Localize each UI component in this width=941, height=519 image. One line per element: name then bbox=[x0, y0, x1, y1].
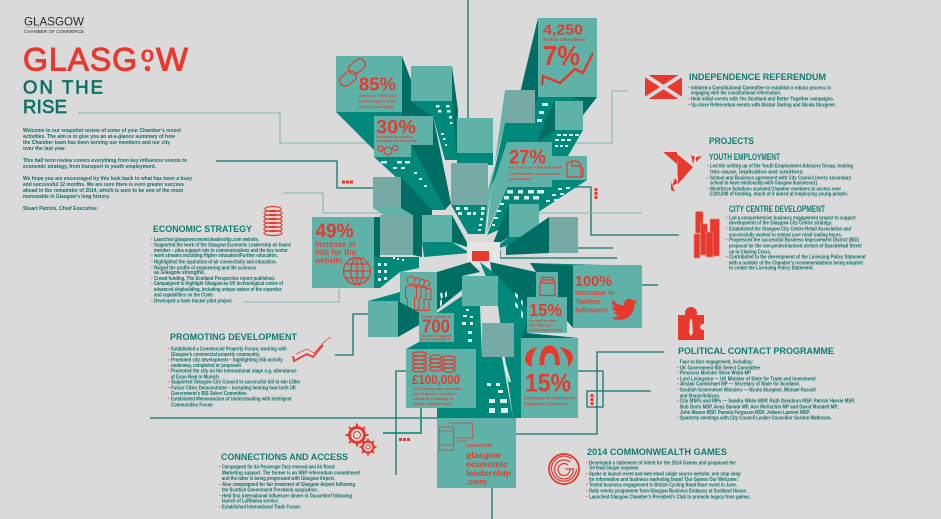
panel: political contact programme: John Mason MSP, Pamela Ferguson MSP, Johann Lamont MSP. bbox=[680, 410, 810, 416]
panel: political contact programme: Lord Livingston — UK Minister of State for Trade and Investment bbox=[680, 376, 816, 382]
building: 15% partners: Increase in Partners/ bbox=[524, 396, 576, 402]
logo bbox=[24, 14, 85, 35]
building: grey tower right of centre bbox=[485, 90, 538, 232]
city centre development: development of the Glasgow City Centre strategy. bbox=[729, 221, 832, 227]
title: o bbox=[140, 41, 154, 67]
city centre development: proposal for the non-pedestrianised stretch of Sauchiehall Street bbox=[729, 243, 862, 249]
youth employment: Workforce Solutions assisted Chamber members to access over bbox=[710, 186, 841, 192]
building: grey far right bbox=[506, 217, 578, 255]
panel: economic strategy: Launched glasgoweconomicleadership.com website. bbox=[154, 237, 259, 243]
panel: promoting development: PROMOTING DEVELOPMENT bbox=[170, 332, 297, 343]
building: launched website: glasgow bbox=[466, 450, 501, 460]
intro text: This half term review covers everything from key influencer events to bbox=[23, 158, 187, 164]
panel: economic strategy: ECONOMIC STRATEGY bbox=[153, 224, 253, 235]
building: 700: for the Glasgow bbox=[421, 334, 451, 338]
city centre development: up to Charing Cross. bbox=[729, 250, 771, 256]
building: 15% documents: international bbox=[529, 324, 551, 328]
city centre development: with a number of the Chamber's recommendations being adopted bbox=[728, 260, 863, 266]
logo: GLASGOW bbox=[24, 14, 85, 28]
panel: 2014 commonwealth games: 'Get Ready Glasgow' programme. bbox=[589, 466, 639, 472]
building: £100,000: of funding was secured bbox=[413, 386, 462, 391]
city centre development: successfully worked to extend core retail trading hours. bbox=[729, 232, 842, 238]
building: 49% website: Increase in bbox=[315, 240, 356, 249]
youth employment: into cause, implication and solutions. bbox=[710, 169, 805, 175]
panel: economic strategy: Crowd funding, The Scotland Perspective report published. bbox=[154, 276, 275, 282]
panel: political contact programme: and Shona Robison. bbox=[680, 393, 720, 399]
title: W bbox=[156, 42, 189, 78]
panel: 2014 commonwealth games: 2014 COMMONWEALTH GAMES bbox=[587, 447, 727, 458]
panel: connections and access: Marketing support. The former is an SNP referendum commitment bbox=[222, 470, 360, 476]
building: 100% Twitter: Increase in bbox=[575, 288, 615, 297]
intro text bbox=[23, 128, 192, 212]
panel: connections and access: Held first international influencer dinner in Dusseldorf following bbox=[222, 493, 352, 499]
youth employment bbox=[707, 152, 853, 198]
building: 15% partners: Platinum Partners. bbox=[524, 402, 569, 408]
building: 15% documents: Increase in career bbox=[529, 319, 559, 323]
panel: economic strategy: Developed a trade tracker pilot project. bbox=[154, 298, 233, 304]
panel: promoting development: underway, completed or proposed. bbox=[171, 363, 242, 369]
building: 27% certification documents: certification documents bbox=[509, 171, 560, 176]
building: launched website: economic bbox=[466, 459, 508, 469]
panel: economic strategy: as Glasgow strengths. bbox=[154, 270, 206, 276]
building: 27% certification documents bbox=[487, 142, 587, 235]
panel: independence referendum: Initiated a Constitutional Committee to establish a robust process to bbox=[691, 85, 831, 91]
centre square bbox=[467, 242, 500, 267]
panel: economic strategy: Campaigned to highlight Glasgow as UK technological centre of bbox=[154, 281, 283, 287]
panel: promoting development: Promoted the city on the international stage e.g. attendance bbox=[171, 369, 297, 375]
intro text: economic strategy, from transport to youth employment. bbox=[23, 164, 157, 170]
building: 700: 700 bbox=[422, 317, 450, 337]
panel: promoting development: Supported Glasgow City Council in successful bid to win £26m bbox=[171, 380, 300, 386]
city centre development bbox=[726, 204, 866, 271]
building: launched website bbox=[437, 418, 516, 488]
building: £100,000: youth employment bbox=[413, 401, 451, 406]
building: back tower bbox=[411, 66, 458, 160]
building: 30% outside membership bbox=[374, 116, 451, 210]
panel: 2014 commonwealth games: for information and business marketing brand 'Our Games Our Welcome.' bbox=[589, 477, 739, 483]
building: 15% partners: 15% bbox=[525, 370, 571, 398]
panel: independence referendum bbox=[688, 72, 836, 108]
building: 100% Twitter: 100% bbox=[575, 273, 612, 290]
panel: political contact programme: Quarterly meetings with City Council Leader Councillor Gordon Matheson. bbox=[680, 415, 832, 421]
panel: political contact programme: UK Government BIS Select Committee bbox=[680, 365, 760, 371]
building: light front left bbox=[422, 215, 470, 257]
intro text: memorable in Glasgow's long history. bbox=[23, 194, 111, 200]
icon: city buildings bbox=[694, 212, 720, 258]
building: 85% member retention: 85% bbox=[359, 74, 396, 94]
panel: connections and access: launch of Lufthansa service. bbox=[222, 499, 279, 505]
panel: economic strategy: Supported the work of the Glasgow Economic Leadership on board bbox=[154, 242, 291, 248]
building: 4,250 event attendees: 4,250 bbox=[543, 22, 583, 38]
building: centre grey bbox=[451, 163, 488, 234]
panel: promoting development: Established a Commercial Property Forum, working with bbox=[171, 346, 287, 352]
intro text: the Chamber team has been serving our members and our city bbox=[23, 140, 170, 146]
city centre development: CITY CENTRE DEVELOPMENT bbox=[729, 204, 825, 215]
building: 4,250 event attendees: 7% bbox=[543, 40, 580, 71]
panel: economic strategy: advanced shipbuilding, including unique nature of the expertise bbox=[154, 287, 282, 293]
building: 85% member retention: Member retention bbox=[359, 93, 398, 98]
panel: connections and access: Established International Trade Forum. bbox=[222, 504, 301, 510]
building: centre rear bbox=[457, 118, 493, 165]
building: people bbox=[400, 272, 437, 313]
city centre development: Established the Glasgow City Centre Retail Association and bbox=[729, 226, 851, 232]
building: small right tower bbox=[537, 101, 583, 156]
panel: economic strategy: member – plus support role to communications and the key sector bbox=[154, 248, 288, 254]
building: 700: Annual estimate of bbox=[421, 315, 452, 319]
building: 27% certification documents: Increase in international bbox=[509, 164, 561, 170]
building: 49% website bbox=[312, 217, 419, 288]
city centre development: Led a comprehensive business engagement project to support bbox=[729, 215, 856, 221]
building: grey centre bottom bbox=[482, 323, 514, 357]
logo: CHAMBER OF COMMERCE bbox=[24, 29, 84, 35]
title bbox=[23, 41, 189, 117]
building: 100% Twitter: followers bbox=[575, 306, 608, 314]
panel: connections and access bbox=[219, 452, 360, 510]
building: 27% certification documents: 27% bbox=[509, 148, 546, 168]
intro text: and successful 12 months. We are sure there is even greater success bbox=[23, 182, 184, 188]
panel: political contact programme: Face to face engagement, including: bbox=[680, 360, 753, 366]
panel: economic strategy: work streams including Higher education/Further education. bbox=[153, 253, 278, 259]
panel: independence referendum: Up close Referendum events with Alistair Darling and Nicola Sturgeon. bbox=[691, 102, 836, 108]
windows: lower bbox=[440, 291, 523, 413]
building: 4,250 event attendees: Event attendees bbox=[543, 37, 586, 42]
panel: promoting development: at Expo Real in Munich. bbox=[171, 374, 220, 380]
intro text: Stuart Patrick, Chief Executive bbox=[23, 206, 97, 212]
icon: zigzag growth line bbox=[293, 337, 331, 361]
building: 100% Twitter: Twitter bbox=[575, 297, 601, 306]
panel: promoting development: Government's BIS Select Committee. bbox=[171, 391, 248, 397]
panel: political contact programme: Scottish Government Ministers — Nicola Sturgeon, Michael Russell bbox=[680, 387, 816, 393]
building: 85% member retention bbox=[336, 56, 433, 150]
panel: political contact programme bbox=[677, 346, 855, 421]
panel: economic strategy: Raised the profile of engineering and life sciences bbox=[154, 265, 256, 271]
panel: political contact programme: City MSPs and MPs — Sandra White MSP, Ruth Davidson MSP, Patrick Harvie MSP, bbox=[680, 399, 855, 405]
panel: 2014 commonwealth games: Tested business engagement in British Cycling Road Race event in June. bbox=[589, 482, 737, 488]
panel: political contact programme: Bob Doris MSP, Anas Sarwar MP, Ann McKechin MP and David Mundell MP, bbox=[680, 404, 838, 410]
panel: political contact programme: Pensions Minister Steve Webb MP bbox=[680, 370, 751, 376]
building: launched website: Launched/ bbox=[466, 443, 493, 449]
icon: coins bbox=[264, 206, 282, 236]
intro text: Welcome to our snapshot review of some of your Chamber's recent bbox=[23, 128, 181, 134]
panel: 2014 commonwealth games: Spoke at launch event and web email single source website, one stop shop bbox=[589, 472, 741, 478]
building: 49% website: 49% bbox=[316, 220, 354, 242]
building: grey left tower bbox=[373, 177, 432, 232]
panel: 2014 commonwealth games: Developed a statement of intent for the 2014 Games and proposed the bbox=[589, 460, 736, 466]
building: 27% certification documents: processed bbox=[509, 176, 532, 181]
icon: gears bbox=[346, 424, 376, 456]
panel: 2014 commonwealth games: Daily events programme from Glasgow Business Embassy at Scotland House. bbox=[589, 488, 747, 494]
intro text: We hope you are encouraged by this look back to what has been a busy bbox=[23, 176, 192, 182]
red connector dots bbox=[342, 180, 598, 441]
panel: economic strategy bbox=[151, 224, 291, 304]
building: launched website: .com bbox=[466, 476, 487, 486]
panel: promoting development: Communities Forum bbox=[171, 402, 213, 408]
city centre development: Progressed the successful Business Improvement District (BID) bbox=[729, 238, 859, 244]
building: 15% documents: 15% bbox=[529, 300, 562, 320]
building: 85% member retention: (15% higher than bbox=[359, 98, 397, 104]
building: grey front left bbox=[380, 215, 422, 257]
icon: G logo bbox=[549, 454, 579, 484]
building: 15% documents bbox=[527, 272, 567, 333]
building: 15% documents: documents processed bbox=[529, 328, 562, 332]
panel: 2014 commonwealth games: Launched Glasgow Chamber's President's Club to promote legacy from games. bbox=[589, 494, 751, 500]
panel: connections and access: Also campaigned for fair treatment of Glasgow Airport following bbox=[222, 482, 355, 488]
panel: projects: PROJECTS bbox=[709, 136, 754, 147]
building: light front right bbox=[491, 204, 539, 250]
panel: promoting development: Promoted city development – highlighting £6b activity bbox=[171, 358, 283, 364]
city centre development: Contributed to the development of the Licensing Policy Statement bbox=[729, 254, 866, 260]
intro text: ahead in the remainder of 2014, which is sure to be one of the most bbox=[23, 188, 183, 194]
panel: connections and access: CONNECTIONS AND ACCESS bbox=[221, 452, 348, 463]
connector lines bbox=[78, 0, 679, 519]
building: centre box bbox=[462, 276, 498, 306]
panel: projects bbox=[707, 136, 866, 271]
panel: promoting development bbox=[168, 332, 300, 408]
panel: promoting development: Future Cities Demonstrator – including hearing how both UK bbox=[171, 385, 296, 391]
panel: connections and access: and the latter is being progressed with Glasgow Airport. bbox=[222, 476, 335, 482]
building: launched website: leadership bbox=[466, 468, 511, 478]
building: 30% outside membership: 30% bbox=[376, 118, 416, 138]
building: 15% partners bbox=[521, 338, 578, 418]
youth employment: £100,000 of funding, much of it aimed at employing young people. bbox=[710, 192, 848, 198]
building: 30% outside membership: Increase in outside bbox=[376, 135, 413, 139]
panel: independence referendum: Held initial events with Yes Scotland and Better Together campaigns. bbox=[691, 97, 834, 103]
intro text: activities. The aim is to give you an at-a-glance summary of how bbox=[23, 134, 176, 140]
building: £100,000: much of it aiming at bbox=[413, 396, 454, 401]
panel: economic strategy: Highlighted the aspiration of air connectivity and education. bbox=[154, 259, 277, 265]
panel: 2014 commonwealth games bbox=[586, 447, 751, 500]
building: left block bbox=[368, 292, 420, 337]
building: £100,000: £100,000 bbox=[412, 373, 460, 387]
title: GLASG bbox=[23, 42, 137, 78]
youth employment: school to have relationship with Glasgow businesses). bbox=[710, 181, 818, 187]
building: 85% member retention: the UK average) bbox=[359, 104, 394, 109]
title: ON THE bbox=[23, 76, 103, 98]
panel: connections and access: Campaigned for Air Passenger Duty removal and Air Route bbox=[222, 464, 335, 470]
panel: promoting development: Established Memorandum of Understanding with Intelligent bbox=[171, 396, 292, 402]
panel: economic strategy: and capabilities on the Clyde. bbox=[154, 293, 214, 299]
icon: origami bird bbox=[663, 152, 702, 192]
building: £100,000 bbox=[406, 349, 476, 408]
youth employment: School and Business agreement with City Council (every secondary bbox=[710, 176, 851, 182]
panel: political contact programme: Alistair Carmichael MP — Secretary of State for Scotland. bbox=[680, 381, 800, 387]
buildings: city skyline bbox=[312, 18, 642, 488]
intro text: over the last year. bbox=[23, 146, 67, 152]
building: 30% outside membership: company membership bbox=[376, 139, 418, 143]
building: £100,000: by Chamber members, bbox=[413, 391, 458, 396]
icon: person with tie bbox=[678, 307, 706, 340]
building: 4,250 event attendees bbox=[505, 18, 597, 190]
panel: promoting development: Glasgow's commercial property community. bbox=[171, 352, 260, 358]
building: 700: Business Awards '14 bbox=[421, 338, 451, 342]
youth employment: YOUTH EMPLOYMENT bbox=[709, 152, 780, 163]
panel: political contact programme: POLITICAL CONTACT PROGRAMME bbox=[678, 346, 834, 357]
building: 700 bbox=[419, 313, 454, 342]
icon: X flag bbox=[645, 75, 682, 99]
panel: independence referendum: INDEPENDENCE REFERENDUM bbox=[689, 72, 826, 83]
title: RISE bbox=[23, 96, 67, 117]
youth employment: Led the setting up of the Youth Employment Advisory Group, looking bbox=[710, 164, 853, 170]
building: 49% website: website bbox=[314, 256, 343, 265]
panel: connections and access: the Scottish Government Prestwick acquisition. bbox=[222, 488, 318, 494]
city centre development: to create the Licensing Policy Statement. bbox=[729, 265, 814, 271]
building: dark and mid centre bottom block bbox=[406, 262, 578, 418]
building: 49% website: hits for the bbox=[315, 248, 357, 257]
panel: independence referendum: engaging with the constitutional referendum. bbox=[691, 91, 781, 97]
building: 100% Twitter bbox=[530, 263, 642, 328]
